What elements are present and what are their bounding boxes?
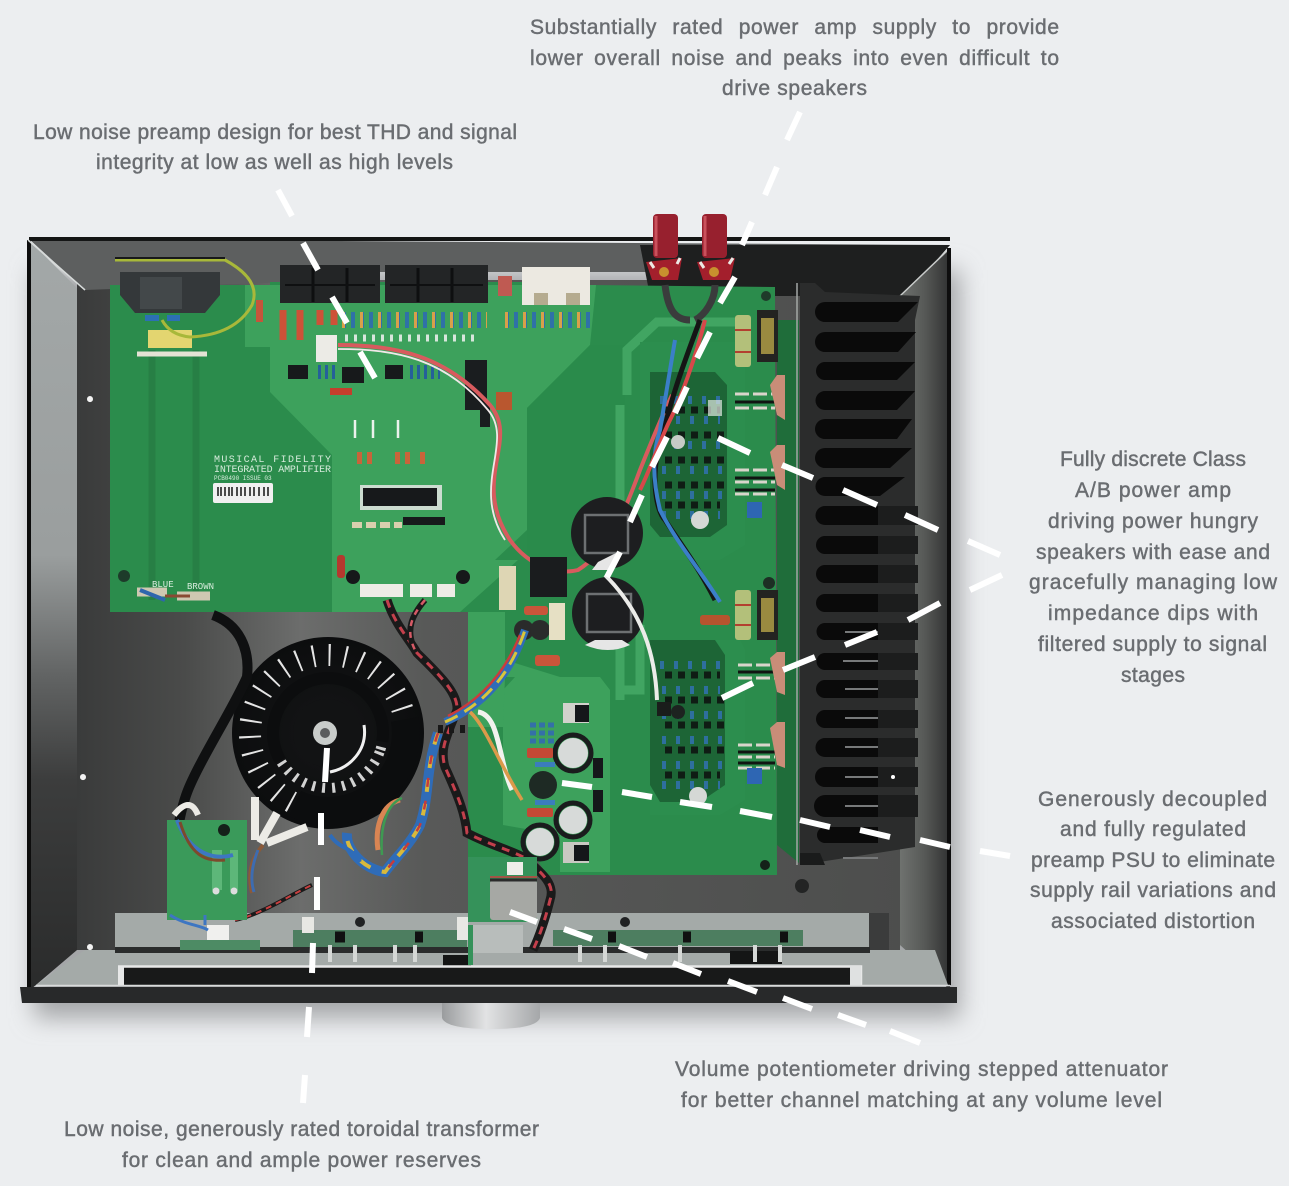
caption: class A/B power amp xyxy=(1029,448,1278,687)
dashed pointer: preamp PSU xyxy=(562,783,1010,856)
caption: power amp supply: Substantially rated power amp supply to provide xyxy=(530,16,1059,39)
caption: class A/B power amp: A/B power amp xyxy=(1075,479,1231,502)
chassis floor xyxy=(77,280,905,950)
caption: volume potentiometer xyxy=(675,1058,1168,1112)
white connector xyxy=(522,267,590,305)
mains cable xyxy=(173,615,248,895)
caption: class A/B power amp: speakers with ease and xyxy=(1036,541,1270,564)
power amp module top xyxy=(660,291,785,589)
black and red twist xyxy=(387,600,551,950)
power amp wire bundle xyxy=(640,285,720,602)
silkscreen label on board: PCB0490 ISSUE 03 xyxy=(214,475,272,482)
caption: toroidal transformer xyxy=(64,1118,539,1172)
lighter psu island xyxy=(468,612,560,727)
volume potentiometer xyxy=(468,857,537,965)
coloured transformer leads xyxy=(347,733,438,872)
caption: toroidal transformer: Low noise, generously rated toroidal transformer xyxy=(64,1118,539,1141)
caption: preamp design: Low noise preamp design for best THD and signal xyxy=(33,121,517,144)
chassis screws xyxy=(83,399,90,947)
caption: class A/B power amp: Fully discrete Class xyxy=(1060,448,1246,471)
left wall xyxy=(29,240,77,990)
lighter preamp board region xyxy=(245,285,596,612)
caption: preamp PSU: preamp PSU to eliminate xyxy=(1031,849,1275,872)
caption: toroidal transformer: for clean and ample power reserves xyxy=(122,1149,481,1172)
speaker terminals xyxy=(646,214,735,280)
caption: power amp supply: lower overall noise and peaks into even difficult to xyxy=(530,47,1059,70)
caption: preamp PSU: supply rail variations and xyxy=(1030,879,1276,902)
heatsink slots xyxy=(814,302,918,843)
dashed pointer: power amp upper xyxy=(718,438,1000,555)
white capacitor wire xyxy=(605,575,657,700)
light power traces xyxy=(620,322,740,700)
heatsink xyxy=(797,283,920,865)
caption: preamp design: integrity at low as well as high levels xyxy=(96,151,453,174)
regulator board components xyxy=(523,703,603,863)
outboard dark board strip xyxy=(777,320,799,863)
caption: class A/B power amp: stages xyxy=(1121,664,1185,687)
dashed pointer: preamp xyxy=(278,190,375,378)
front edge xyxy=(20,987,957,1003)
right wall xyxy=(900,248,950,990)
dashed pointer: power amp lower xyxy=(722,575,1002,698)
caption: preamp design xyxy=(33,121,517,174)
rear wall xyxy=(29,239,950,296)
amplifier chassis xyxy=(20,239,957,1029)
caption: preamp PSU: Generously decoupled xyxy=(1038,788,1267,811)
chassis drop shadow xyxy=(34,270,960,1018)
caption: volume potentiometer: Volume potentiometer driving stepped attenuator xyxy=(675,1058,1168,1081)
preamp twisted wire xyxy=(338,345,672,571)
silkscreen label on board xyxy=(152,455,331,592)
caption: preamp PSU: associated distortion xyxy=(1051,910,1255,933)
left board traces xyxy=(152,350,196,600)
silkscreen label on board: MUSICAL FIDELITY xyxy=(214,455,331,466)
caption: class A/B power amp: filtered supply to signal xyxy=(1038,633,1267,656)
caption: preamp PSU: and fully regulated xyxy=(1060,818,1246,841)
amp dark island lower xyxy=(650,640,725,802)
front panel slot xyxy=(120,967,860,985)
power amp module bottom xyxy=(657,590,785,870)
caption: preamp PSU xyxy=(1030,788,1276,933)
caption: power amp supply: drive speakers xyxy=(722,77,867,100)
fin glints xyxy=(843,632,878,858)
input sockets xyxy=(280,265,590,305)
preamp components xyxy=(118,310,672,600)
caption: class A/B power amp: driving power hungry xyxy=(1048,510,1258,533)
darker centre plane xyxy=(527,345,625,560)
neutral terminals xyxy=(137,588,167,596)
silkscreen label on board: INTEGRATED AMPLIFIER xyxy=(214,465,331,476)
dashed pointer: toroid xyxy=(303,748,327,1103)
small power entry board xyxy=(167,805,260,950)
power supply capacitors xyxy=(499,497,657,700)
front inner panel xyxy=(36,913,948,985)
front control boards xyxy=(293,917,803,962)
caption: class A/B power amp: impedance dips with xyxy=(1048,602,1258,625)
volume knob xyxy=(442,1003,540,1029)
barcode sticker xyxy=(213,483,273,503)
lighter regulator board region xyxy=(503,677,610,872)
fin extensions xyxy=(878,506,918,817)
amp dark island upper xyxy=(650,372,727,537)
dashed pointer: volume xyxy=(510,912,920,1043)
silkscreen label on board: BROWN xyxy=(187,582,214,592)
toroid winding highlights xyxy=(250,655,406,811)
red and black signal lead xyxy=(235,885,312,920)
transformer wiring xyxy=(173,600,551,950)
mains inlet xyxy=(115,258,263,354)
caption: class A/B power amp: gracefully managing low xyxy=(1029,571,1278,594)
toroidal transformer xyxy=(232,637,424,829)
silkscreen label on board: BLUE xyxy=(152,580,174,590)
white transformer leads xyxy=(255,797,307,843)
main green circuit board xyxy=(110,282,799,875)
caption: power amp supply xyxy=(530,16,1059,100)
dashed pointer: power supply xyxy=(607,112,800,577)
caption: volume potentiometer: for better channel matching at any volume level xyxy=(681,1089,1162,1112)
